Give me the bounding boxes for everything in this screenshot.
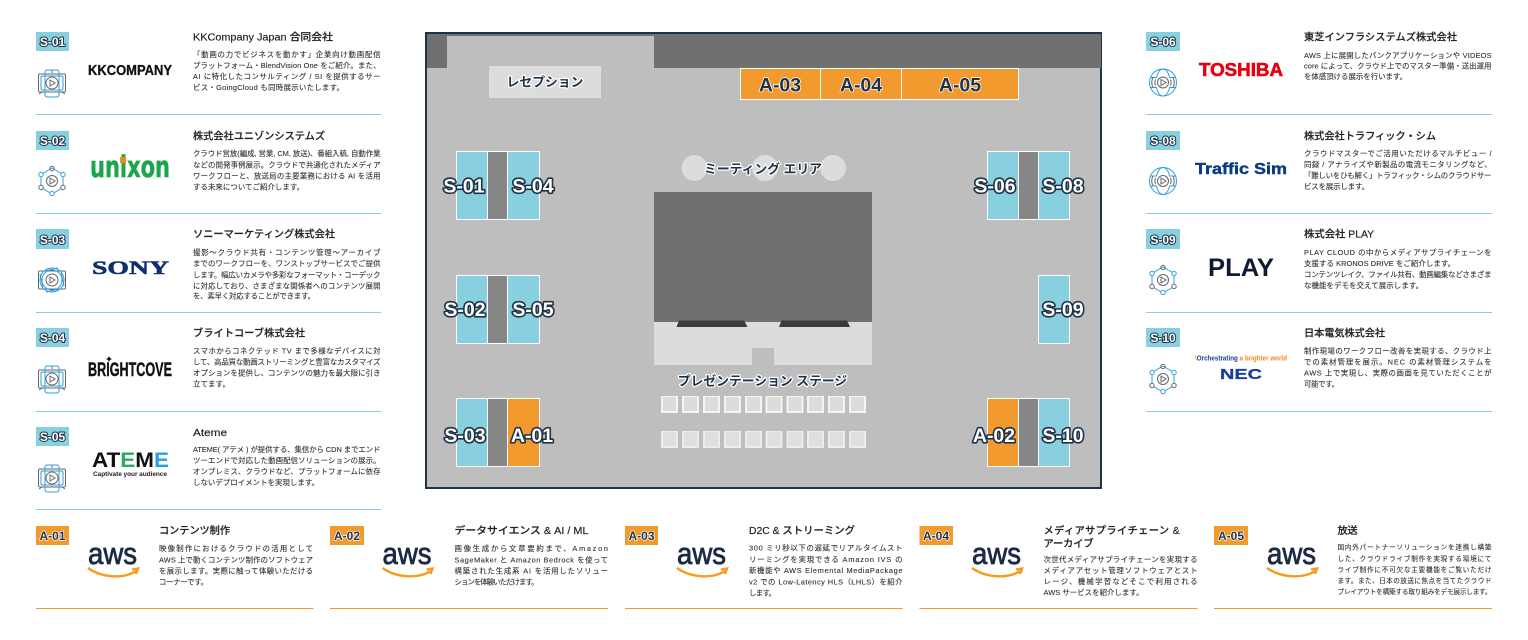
logo: Brightcove: BRIGHTCOVE [88,360,172,381]
logo: Ateme: Captivate your audience [93,471,167,478]
badge A-04 [920,526,953,545]
description: プレイアウトを構築する取り組みをデモ展示します。 [1338,587,1492,596]
description: を展示します。実際に触って体験いただける [159,566,313,576]
heading [1044,524,1180,550]
logo: Sony: SONY [92,258,169,279]
description: メディアアセット管理ソフトウェアとスト [1044,566,1198,575]
description [1338,542,1492,596]
description: PLAY CLOUD の中からメディアサプライチェーンを [1304,248,1492,257]
description: 画像生成から文章要約まで、Amazon [454,544,608,553]
A-05 booth: A-05 [939,74,981,96]
description: SageMaker と Amazon Bedrock を使って [454,556,608,564]
badge S-05 [36,427,69,446]
panel: S-08 [1146,130,1492,194]
heading: 株式会社ユニゾンシステムズ [193,130,325,142]
description: クラウド営放(編成, 営業, CM, 放送)、番組入稿, 自動作業 [193,149,381,158]
floor map [426,33,1101,488]
badge S-09 [1146,229,1180,249]
badge S-03 [36,229,69,249]
booths S-01 and S-04: S-01 [443,176,485,198]
badge A-01 [36,526,69,545]
booths A-02 and S-10 [973,398,1084,466]
heading: Ateme [193,428,227,439]
booths S-06 and S-08: S-08 [1042,176,1084,198]
booths S-02 and S-05: S-02 [444,299,486,321]
heading: データサイエンス & AI / ML [454,524,589,537]
description: 支援する KRONOS DRIVE をご紹介します。 [1304,259,1455,268]
description: リーミングを実現できる Amazon IVS の [749,555,902,564]
badge A-04: A-04 [923,529,949,543]
badge S-08: S-08 [1150,134,1176,148]
logo: Toshiba: TOSHIBA [1199,60,1283,80]
meeting area: ミーティング エリア [704,162,822,176]
logo: AWS: aws [972,536,1021,571]
badge A-02: A-02 [334,529,360,543]
description: 構築された生成系 AI を活用したソリュー [454,566,608,576]
description: プラットフォーム・BlendVision One をご紹介。また、 [193,61,380,70]
A-05 booth [902,68,1018,100]
booths A-02 and S-10: A-02 [973,425,1015,447]
badge S-02 [36,131,69,150]
badge A-03: A-03 [628,529,655,543]
description: しないデプロイメントを実現します。 [193,478,319,487]
description: します。 [749,588,776,598]
description [193,248,381,300]
logo: Brightcove [88,356,172,381]
description: を、素早く対応することができます。 [193,292,315,300]
heading: D2C & ストリーミング [749,524,855,537]
icon: globe [1150,168,1176,194]
description [193,149,381,192]
badge S-04 [36,328,69,347]
panel: A-05 [1214,524,1492,596]
meeting area [682,155,846,181]
A-04 booth: A-04 [840,74,882,96]
back wall [427,34,1101,68]
A-03 booth: A-03 [759,74,801,96]
icon: network [39,166,65,196]
description: スマホからコネクテッド TV まで多様なデバイスに対 [193,346,381,356]
seats row 2 [661,431,866,448]
badge A-01: A-01 [39,529,66,543]
heading: コンテンツ制作 [159,524,230,537]
description: 映像制作におけるクラウドの活用として [159,544,313,553]
booths S-03 and A-01 [444,398,553,466]
heading: 株式会社トラフィック・シム [1304,130,1436,142]
description: 撮影～クラウド共有・コンテンツ管理～アーカイブ [193,248,381,257]
booths S-02 and S-05: S-05 [512,299,554,321]
description: して、高品質な動画ストリーミングと豊富なカスタマイズ [193,358,381,366]
entrance area [447,36,654,68]
description [193,346,381,388]
logo: NEC [1195,354,1287,383]
map floor with border [426,33,1101,488]
logo: AWS: aws [677,536,726,571]
description: ビス・GoingCloud も同時展示いたします。 [193,83,344,92]
booths S-03 and A-01: S-03 [444,425,486,447]
badge S-03: S-03 [40,233,65,247]
reception: レセプション [507,74,584,90]
icon: network [1150,364,1176,394]
description: AWS 上で動くコンテンツ制作のソフトウェア [159,556,313,564]
badge S-08 [1146,131,1180,150]
badge S-01 [36,32,69,51]
description: 制作現場のワークフロー改善を実現する、クラウド上 [1304,346,1492,356]
description: を体感頂ける展示を行います。 [1304,72,1407,81]
panel: A-03 [625,524,903,598]
panel: S-04 [36,326,381,393]
description [193,50,381,92]
description: 立てます。 [193,380,230,388]
badge A-02 [330,526,364,545]
booth S-09 [1038,276,1084,344]
description: などの開発事例展示。クラウドで共通化されたメディア [193,160,380,170]
booths A-02 and S-10: S-10 [1042,425,1084,447]
description: 国内外パートナーソリューションを連携し構築 [1338,542,1492,552]
description: での素材管理を展示。NEC の素材管理システムを [1304,358,1492,366]
logo: NEC: \Orchestrating a brighter world [1195,354,1287,362]
description: ツーエンドで対応した動画配信ソリューションの展示。 [193,456,380,465]
description: に対応しており、さまざまな関係者へのコンテンツ展開 [193,282,380,290]
description [454,544,608,586]
description: する未来についてご紹介します。 [193,182,304,192]
badge S-04: S-04 [40,331,65,345]
badge S-02: S-02 [40,134,65,148]
panel: A-04 [920,524,1198,597]
logo: AWS: aws [1267,536,1316,571]
panel: S-05 [36,427,381,492]
badge S-10: S-10 [1150,331,1176,345]
icon: network [1150,265,1176,295]
panel: A-02 [330,524,608,586]
logo: Traffic Sim: Traffic Sim [1195,161,1287,178]
badge S-09: S-09 [1150,233,1176,247]
description [1304,346,1492,388]
booths S-03 and A-01: A-01 [511,425,553,447]
description [1044,555,1198,597]
logo: Play: PLAY [1208,254,1274,282]
heading: 放送 [1338,524,1358,537]
panel: S-03 [36,228,381,300]
panel: S-02 [36,130,381,196]
badge A-05: A-05 [1218,529,1244,543]
description: ます。また、日本の放送に焦点を当てたクラウド [1338,576,1492,585]
description: な機能をデモを交えて展示します。 [1304,281,1423,290]
logo: Ateme: ATEME [92,449,169,472]
description: ビスを展示します。 [1304,182,1369,191]
description: レージ、機械学習などそこで利用される [1044,577,1198,586]
badge S-06 [1146,32,1180,51]
badge S-06: S-06 [1150,35,1176,49]
panel: S-10 [1146,326,1492,394]
booths S-02 and S-05 [444,276,554,344]
description: AWS 上で実現し、実際の画面を見ていただくことが [1304,368,1492,378]
description: 300 ミリ秒以下の遅延でリアルタイムスト [749,544,902,552]
description: v2 での Low-Latency HLS（LHLS）を紹介 [749,578,903,586]
description [193,445,381,487]
description: core によって、クラウド上でのマスター準備・送出運用 [1304,62,1492,71]
description: 同録 / アナライズや新製品の電流モニタリングなど、 [1304,160,1492,169]
seats row 1 [661,396,866,413]
booth S-09: S-09 [1042,299,1084,321]
heading: メディアサプライチェーン & [1044,524,1180,537]
heading: 東芝インフラシステムズ株式会社 [1304,30,1457,44]
reception [489,66,601,98]
description [1304,51,1492,81]
description: ATEME( アテメ ) が提供する、集信から CDN までエンド [193,445,380,454]
badge S-01: S-01 [40,35,65,49]
icon: screens [38,465,66,492]
description: ライブ制作に不可欠な主要機能をご覧いただけ [1338,565,1492,574]
panel: S-09 [1146,228,1492,295]
heading: ブライトコーブ株式会社 [193,326,305,340]
heading: 日本電気株式会社 [1304,326,1385,340]
description [1304,149,1492,191]
A-03 booth [740,68,820,100]
logo: AWS: aws [382,536,432,571]
description: します。幅広いカメラや多彩なフォーマット・コーデック [193,270,380,280]
description: AWS サービスを紹介します。 [1044,588,1144,597]
description: クラウドマスターでご活用いただけるマルチビュー / [1304,149,1492,158]
logo: unixon: unixon [90,150,170,184]
heading: アーカイブ [1044,537,1094,550]
icon: camera [38,268,66,292]
description: した、クラウドライブ制作を実現する環境にて [1338,554,1492,563]
logo: KKCompany: KKCOMPANY [88,62,172,79]
description: ションを体験いただけます。 [454,578,538,586]
description: 新機能や AWS Elemental MediaPackage [749,566,902,575]
description: オンプレミス、クラウドなど、プラットフォームに依存 [193,467,381,476]
logo: AWS: aws [88,536,137,571]
A-04 booth [820,68,902,100]
description [159,544,313,586]
heading: ソニーマーケティング株式会社 [193,228,335,240]
description: AWS 上に展開したバンクアプリケーションや VIDEOS [1304,51,1492,60]
description: までのワークフローを、ワンストップサービスでご提供 [193,259,381,268]
presentation stage: プレゼンテーション ステージ [678,374,847,388]
booths S-01 and S-04 [443,152,554,220]
badge A-05 [1214,526,1248,545]
description: 「難しいをひも解く」トラフィック・シムのクラウドサー [1304,171,1492,180]
booths S-06 and S-08: S-06 [974,176,1016,198]
description: ワークフローと、放送局の主要業務における AI を活用 [193,172,380,180]
description: オプションを提供し、コンテンツの魅力を最大限に引き [193,368,380,378]
presentation stage [654,192,872,388]
badge S-10 [1146,328,1180,347]
description: 「動画の力でビジネスを動かす」企業向け動画配信 [193,50,381,59]
badge S-05: S-05 [40,430,65,444]
panel: A-01 [36,524,313,586]
booths S-01 and S-04: S-04 [512,176,554,198]
description: コーナーです。 [159,578,208,586]
panel: S-06 [1146,30,1492,96]
badge A-03 [625,526,658,545]
description [749,544,903,598]
description: コンテンツレイク、ファイル共有、動画編集などさまざま [1304,270,1492,279]
icon: screens [38,70,66,97]
logo: NEC: NEC [1220,366,1262,383]
description: 次世代メディアサプライチェーンを実現する [1044,555,1198,564]
icon: screens [38,366,66,393]
heading: 株式会社 PLAY [1304,228,1374,240]
panel: S-01 [36,30,381,97]
booths S-06 and S-08 [974,152,1084,220]
heading: KKCompany Japan 合同会社 [193,30,333,44]
description: AI に特化したコンサルティング / SI を提供するサー [193,72,380,81]
description [1304,248,1492,290]
description: 可能です。 [1304,380,1339,388]
icon: globe [1150,69,1176,96]
